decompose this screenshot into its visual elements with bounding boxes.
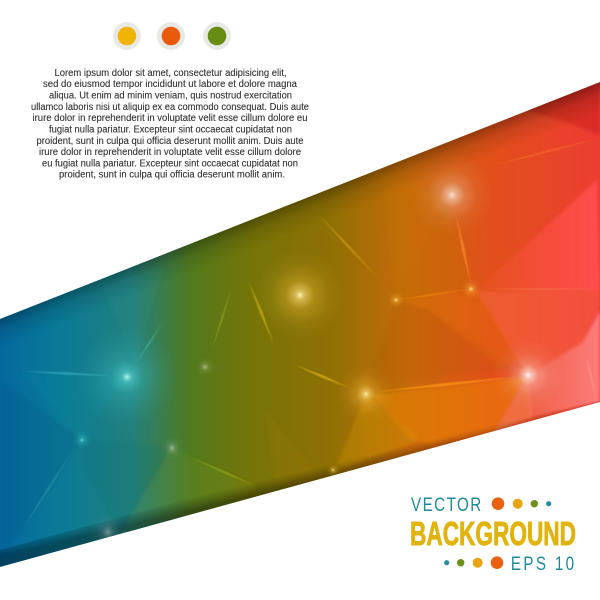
body text block: ullamco laboris nisi ut aliquip ex ea commodo consequat. Duis aute — [31, 102, 310, 113]
body text block: irure dolor in reprehenderit in voluptate velit esse cillum dolore — [39, 147, 302, 158]
title lockup — [410, 493, 576, 574]
icon: orange button — [157, 22, 185, 50]
body text block: irure dolor in reprehenderit in voluptate velit esse cillum dolore eu — [32, 113, 308, 124]
edge shading: top — [0, 82, 600, 357]
body text block: proident, sunt in culpa qui officia deserunt mollit anim. Duis aute — [36, 136, 304, 147]
icon: green button — [203, 22, 231, 50]
body text block: eu fugiat nulla pariatur. Excepteur sint occaecat cupidatat non — [42, 158, 298, 170]
body text block: Lorem ipsum dolor sit amet, consectetur adipisicing elit, — [54, 68, 286, 79]
edge shading: bottom — [0, 385, 600, 567]
body text block — [31, 68, 310, 180]
thin light rays — [20, 138, 600, 530]
dots row lower — [444, 556, 503, 569]
icon: yellow button — [113, 22, 141, 50]
body text block: aliqua. Ut enim ad minim veniam, quis nostrud exercitation — [49, 90, 292, 102]
body text block: fugiat nulla pariatur. Excepteur sint occaecat cupidatat non — [49, 124, 292, 136]
body text block: sed do eiusmod tempor incididunt ut labore et dolore magna — [43, 79, 298, 90]
dots row upper — [492, 497, 551, 510]
low-poly facets — [42, 83, 600, 530]
heading: VECTOR: VECTOR — [411, 493, 481, 515]
icon row: three coloured buttons — [113, 22, 231, 50]
heading: EPS 10: EPS 10 — [511, 552, 574, 574]
light glows — [72, 153, 564, 552]
body text block: proident, sunt in culpa qui officia deserunt mollit anim. — [59, 170, 285, 180]
